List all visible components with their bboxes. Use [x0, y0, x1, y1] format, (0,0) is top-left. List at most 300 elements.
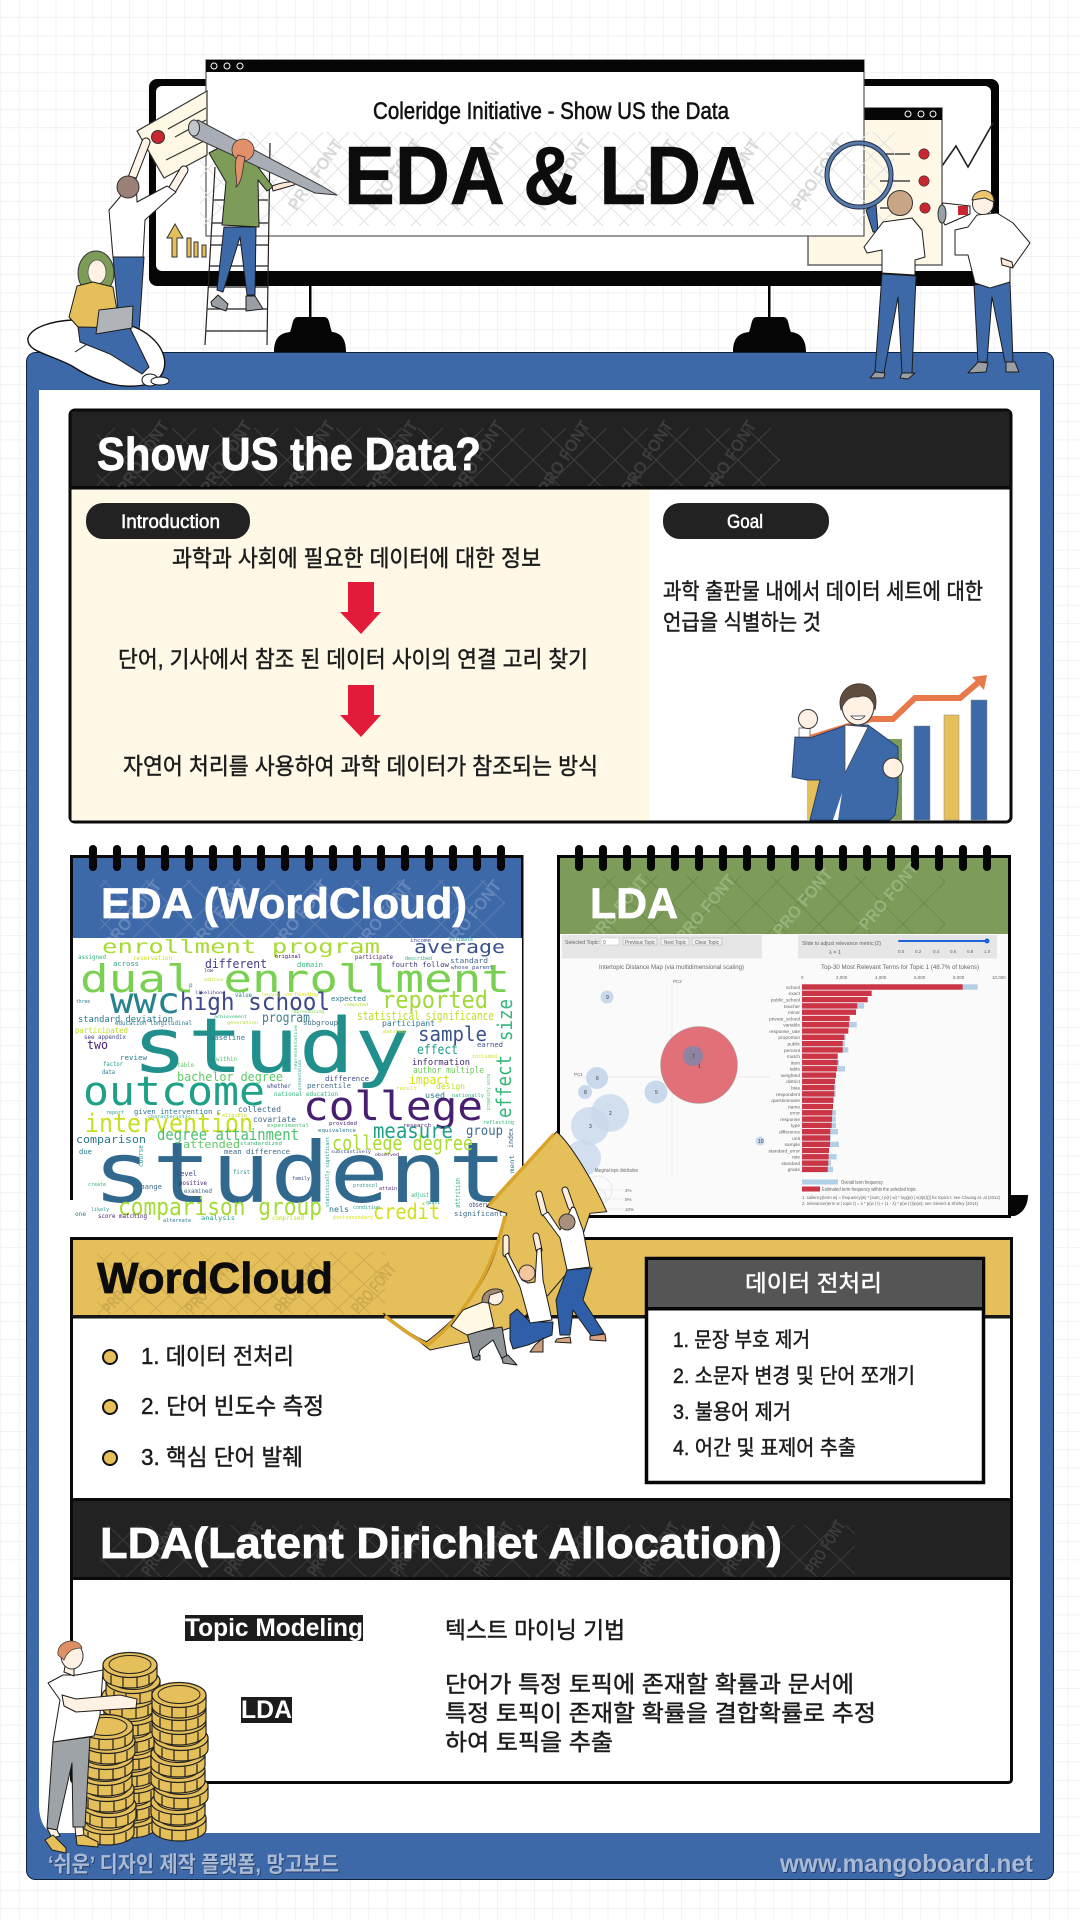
- wordcloud image: student: [93, 1124, 507, 1222]
- document: [137, 91, 207, 178]
- person middle: [505, 1236, 553, 1352]
- wordcloud image: impact: [409, 1073, 450, 1087]
- wordcloud image: degree attainment: [157, 1125, 299, 1144]
- wordcloud image: described: [405, 956, 432, 962]
- panel: LDA explanation: PRO FONT: [303, 1518, 352, 1580]
- illustration: ladder and pencil: [188, 120, 337, 345]
- wordcloud image: statistically significant: [325, 1137, 331, 1207]
- wordcloud image: average: [414, 937, 505, 958]
- intertopic map: 10: [758, 1139, 764, 1145]
- title window: [200, 60, 895, 236]
- bar chart: top-30 terms: difference: [779, 1130, 800, 1136]
- wordcloud image: result: [396, 1086, 417, 1092]
- wordcloud image: college degree: [332, 1131, 473, 1155]
- wordcloud image: participate: [355, 954, 393, 961]
- intertopic map: 3: [589, 1124, 592, 1130]
- wordcloud image: expected: [331, 995, 366, 1003]
- wordcloud image: baseline: [210, 1034, 245, 1042]
- panel: Show US the Data: PRO FONT: [535, 417, 594, 497]
- wordcloud image: low: [204, 968, 214, 974]
- panel: LDA calendar: [558, 849, 1040, 1218]
- wordcloud image: design: [436, 1082, 465, 1091]
- wordcloud image: research: [403, 1123, 431, 1129]
- wordcloud image: equivalence: [318, 1128, 356, 1134]
- coin stack right: [151, 1682, 208, 1841]
- bar chart: top-30 terms: 10,000: [992, 975, 1006, 980]
- intertopic map: 5%: [625, 1197, 632, 1202]
- coin stack front: [78, 1714, 136, 1845]
- pill: Goal: [663, 503, 829, 539]
- wordcloud image: included: [472, 1054, 497, 1060]
- calendar rings: [93, 849, 501, 867]
- label: Topic Modeling: Topic Modeling: [185, 1614, 363, 1642]
- blue frame panel: [26, 352, 1054, 1880]
- wordcloud image: high school: [180, 988, 330, 1016]
- wordcloud image: quasi: [426, 1200, 440, 1206]
- man: [47, 1737, 90, 1830]
- wordcloud image: index: [507, 1128, 515, 1148]
- wordcloud image: standardized: [240, 1141, 282, 1147]
- panel: Show US the Data: PRO FONT: [449, 417, 508, 497]
- bar chart: top-30 terms: minor: [788, 1010, 800, 1016]
- wordcloud image: positive: [179, 1180, 207, 1187]
- wordcloud image: credit: [373, 1200, 440, 1224]
- wordcloud image: mean difference: [224, 1148, 290, 1156]
- controls: 0.4: [933, 949, 940, 954]
- box list: [673, 1329, 915, 1460]
- wordcloud image: intervention: [85, 1109, 253, 1139]
- wordcloud image: propensity score: [486, 1074, 492, 1110]
- wordcloud image: first: [233, 1169, 250, 1176]
- panel: LDA explanation: PRO FONT: [137, 1518, 186, 1580]
- bar chart: top-30 terms: item: [791, 1060, 800, 1066]
- wordcloud image: percentile: [307, 1082, 351, 1090]
- wordcloud image: examined: [184, 1188, 212, 1195]
- chart legend and notes: [802, 1180, 1000, 1206]
- wordcloud image: enrollment program: [102, 936, 380, 958]
- heading: WordCloud: [97, 1254, 333, 1303]
- wordcloud image: original: [275, 954, 301, 960]
- intertopic map: PC1: [574, 1072, 583, 1077]
- intertopic map: 2%: [625, 1188, 632, 1193]
- wordcloud image: collected: [238, 1105, 281, 1114]
- wordcloud image: attended: [183, 1138, 240, 1151]
- text: LDA definition: [445, 1671, 876, 1755]
- wordcloud image: national education: [274, 1091, 338, 1098]
- bar chart: top-30 terms: questionnaire: [771, 1098, 800, 1104]
- panel: EDA WordCloud calendar: PRO FONT: [186, 876, 252, 953]
- wordcloud image: reported: [382, 986, 488, 1014]
- wordcloud image: measure: [373, 1119, 453, 1143]
- controls: λ = 1: [829, 950, 841, 956]
- panel: Show US the Data: PRO FONT: [701, 417, 760, 497]
- bullet list: [103, 1343, 324, 1470]
- wordcloud image: comparison group: [118, 1193, 322, 1221]
- panel: LDA explanation: PRO FONT: [552, 1518, 601, 1580]
- header monitor: [149, 79, 999, 352]
- person right: [539, 1190, 606, 1343]
- wordcloud image: covariate: [253, 1115, 296, 1124]
- intertopic map: 2: [609, 1111, 612, 1117]
- wordcloud image: attrition: [454, 1178, 462, 1208]
- panel: WordCloud: [72, 1238, 1012, 1500]
- intro step 2: 단어, 기사에서 참조 된 데이터 사이의 연결 고리 찾기: [118, 646, 588, 672]
- wordcloud image: characteristic: [148, 1114, 192, 1119]
- bar chart: top-30 terms: standard: [781, 1161, 800, 1167]
- wordcloud image: value: [235, 992, 252, 999]
- wordcloud image: size: [493, 999, 517, 1041]
- bar chart: top-30 terms: exact: [789, 991, 801, 997]
- wordcloud image: create: [88, 1182, 106, 1188]
- wordcloud image: presentation: [297, 1059, 302, 1090]
- chart legend and notes: Overall term frequency: [841, 1180, 883, 1186]
- wordcloud image: standard: [450, 957, 488, 965]
- wordcloud image: one: [75, 1211, 86, 1218]
- wordcloud image: comprised: [272, 1215, 304, 1222]
- panel: EDA WordCloud calendar: PRO FONT: [440, 876, 506, 953]
- footer right url: www.mangoboard.net: [779, 1850, 1034, 1878]
- goal text: 언급을 식별하는 것: [663, 610, 821, 635]
- illustration: businessman with growth chart: [792, 675, 987, 820]
- bar chart: top-30 terms: standard_error: [769, 1148, 800, 1154]
- controls: 0.6: [950, 949, 957, 954]
- text: Topic Modeling definition: 텍스트 마이닝 기법: [445, 1617, 625, 1643]
- illustration: man with coin stacks: [45, 1641, 208, 1853]
- panel: Show US the Data: PRO FONT: [280, 417, 339, 497]
- footer left text: ‘쉬운’ 디자인 제작 플랫폼, 망고보드: [48, 1852, 339, 1877]
- bullet list: 3. 핵심 단어 발췌: [141, 1444, 303, 1470]
- coin stack back: [102, 1652, 160, 1838]
- title window: PRO FONT: [363, 135, 426, 214]
- wordcloud image: ment: [509, 1155, 516, 1173]
- wordcloud image: group: [466, 1124, 503, 1139]
- bar chart: top-30 terms: weighted: [781, 1073, 800, 1079]
- wordcloud image: reservation: [133, 955, 172, 962]
- wordcloud image: across: [113, 960, 139, 968]
- intro step 1: 과학과 사회에 필요한 데이터에 대한 정보: [172, 545, 541, 571]
- wordcloud image: difference: [325, 1075, 369, 1083]
- bar chart: top-30 terms: bias: [791, 1086, 801, 1092]
- panel: LDA calendar: PRO FONT: [769, 865, 837, 940]
- person left: [451, 1289, 517, 1365]
- wordcloud image: participated: [75, 1026, 128, 1035]
- bar chart: top-30 terms: unit: [792, 1136, 801, 1142]
- label: LDA: LDA: [241, 1696, 292, 1724]
- panel: LDA calendar: PRO FONT: [672, 871, 740, 946]
- box list: 1. 문장 부호 제거: [673, 1329, 810, 1352]
- controls: Previous Topic: [625, 940, 655, 946]
- wordcloud image: three: [76, 999, 90, 1005]
- intertopic map: 8: [584, 1090, 587, 1096]
- controls: [562, 935, 997, 958]
- intertopic map: 6: [596, 1076, 599, 1082]
- heading: LDA(Latent Dirichlet Allocation): [100, 1519, 782, 1568]
- bar chart: top-30 terms: school: [786, 985, 800, 991]
- wordcloud image: likely: [91, 1207, 109, 1213]
- goal text: 과학 출판물 내에서 데이터 세트에 대한: [663, 579, 983, 604]
- controls: 1.0: [984, 949, 991, 954]
- wordcloud image: learning: [262, 992, 280, 997]
- panel: Show US the Data: PRO FONT: [618, 417, 677, 497]
- wordcloud image: observ: [469, 1201, 489, 1209]
- wordcloud image: different: [205, 957, 267, 971]
- bar chart: top-30 terms: table: [790, 1066, 800, 1072]
- wordcloud image: participant: [382, 1019, 435, 1028]
- wordcloud image: see appendix: [84, 1034, 126, 1041]
- controls: 0.0: [898, 949, 905, 954]
- wordcloud image: attain: [379, 1186, 397, 1192]
- box title: 데이터 전처리: [745, 1270, 882, 1296]
- panel: LDA explanation: PRO FONT: [220, 1518, 269, 1580]
- wordcloud image: dual enrollment: [80, 957, 510, 1001]
- bar chart: top-30 terms: 6,000: [914, 975, 926, 980]
- panel: LDA calendar: PRO FONT: [585, 871, 653, 946]
- pill: Goal: Goal: [727, 512, 763, 533]
- controls: Clear Topic: [695, 940, 719, 946]
- chart legend and notes: Estimated term frequency within the selected topic: [822, 1187, 916, 1193]
- panel: Show US the Data: [70, 410, 1011, 822]
- wordcloud image: change: [136, 1183, 162, 1191]
- wordcloud image: adjust: [411, 1192, 429, 1199]
- wordcloud image: factor: [103, 1061, 123, 1068]
- panel: LDA explanation: PRO FONT: [386, 1518, 435, 1580]
- title window: PRO FONT: [701, 135, 764, 214]
- wordcloud image: whose parent: [451, 965, 493, 971]
- LDA visualisation: [562, 935, 1006, 1212]
- wordcloud image: review: [120, 1054, 148, 1062]
- bar chart: top-30 terms: 4,000: [875, 975, 887, 980]
- goal text: [663, 579, 983, 635]
- panel: EDA WordCloud calendar: PRO FONT: [268, 876, 334, 953]
- standing man: [113, 257, 144, 332]
- wordcloud image: representing: [291, 1009, 325, 1014]
- bar chart: top-30 terms: district: [786, 1079, 801, 1085]
- intertopic map: 5: [655, 1090, 658, 1096]
- box: data preprocessing: [646, 1258, 984, 1482]
- panel: WordCloud: PRO FONT: [98, 1259, 152, 1318]
- bar chart: top-30 terms: response: [780, 1117, 800, 1123]
- bar chart: top-30 terms: response_rate: [769, 1029, 800, 1035]
- panel: LDA explanation: PRO FONT: [801, 1516, 850, 1578]
- wordcloud image: p: [189, 982, 193, 989]
- bar chart: top-30 terms: public: [787, 1042, 801, 1048]
- bar chart: top-30 terms: teacher: [784, 1004, 800, 1010]
- panel: LDA explanation: PRO FONT: [718, 1518, 767, 1580]
- panel: WordCloud: PRO FONT: [270, 1259, 324, 1318]
- controls: 0.8: [967, 949, 974, 954]
- wordcloud image: income: [410, 938, 431, 944]
- panel: LDA calendar: PRO FONT: [855, 859, 923, 934]
- wordcloud image: fourth follow: [391, 961, 450, 969]
- intertopic map: 7: [692, 1054, 695, 1060]
- wordcloud image: table: [177, 1062, 194, 1069]
- bar chart: top-30 terms: percent: [784, 1048, 801, 1054]
- panel: EDA WordCloud calendar: PRO FONT: [100, 876, 166, 953]
- icon: zigzag line chart: [942, 123, 993, 167]
- wordcloud image: study: [132, 1001, 410, 1090]
- wordcloud image: eligible: [222, 1113, 247, 1119]
- title window: PRO FONT: [618, 135, 681, 214]
- heading: EDA (WordCloud): [101, 880, 467, 928]
- bar chart: top-30 terms: error: [790, 1110, 800, 1116]
- pill: Introduction: [86, 503, 250, 539]
- intro step 3: 자연어 처리를 사용하여 과학 데이터가 참조되는 방식: [123, 753, 598, 779]
- wordcloud image: given intervention c: [134, 1108, 221, 1116]
- bar chart: top-30 terms: grade: [788, 1167, 800, 1173]
- wordcloud image: information: [412, 1058, 470, 1068]
- wordcloud image: level: [176, 1170, 197, 1178]
- controls: Selected Topic:: [565, 940, 600, 946]
- panel: WordCloud: PRO FONT: [347, 1259, 401, 1318]
- sitting woman on mouse: [28, 320, 165, 386]
- heading: LDA: [590, 880, 678, 928]
- pill: Introduction: Introduction: [121, 512, 220, 533]
- heading: Show US the Data?: [97, 428, 481, 480]
- controls: 0: [603, 940, 606, 946]
- title window: PRO FONT: [787, 135, 850, 214]
- wordcloud image: [73, 936, 522, 1224]
- wordcloud image: used: [425, 1091, 445, 1100]
- box list: 3. 불용어 제거: [673, 1401, 791, 1424]
- text: LDA definition: 하여 토픽을 추출: [445, 1729, 613, 1755]
- wordcloud image: condition: [353, 1205, 380, 1211]
- wordcloud image: bachelor degree: [177, 1070, 283, 1084]
- bar chart: top-30 terms: name: [788, 1106, 800, 1110]
- panel: LDA explanation: [72, 1500, 1012, 1782]
- wordcloud image: outcome: [83, 1069, 265, 1115]
- controls: Slide to adjust relevance metric:(2): [802, 941, 881, 947]
- bar chart: top-30 terms: 2,000: [836, 975, 848, 980]
- box list: 2. 소문자 변경 및 단어 쪼개기: [673, 1365, 915, 1388]
- wordcloud image: computed: [344, 1002, 369, 1007]
- arrow down 1: [340, 582, 381, 634]
- panel: EDA WordCloud calendar: PRO FONT: [351, 876, 417, 953]
- intertopic map: Marginal topic distribution: [595, 1168, 638, 1174]
- wordcloud image: family: [292, 1176, 310, 1182]
- wordcloud image: analysis: [201, 1215, 235, 1222]
- intertopic map: 1: [698, 1064, 701, 1070]
- wordcloud image: whether: [267, 1083, 291, 1090]
- LDA visualisation: Top-30 Most Relevant Terms for Topic 1 (48.7% of tokens): [821, 964, 979, 971]
- bar chart: top-30 terms: match: [787, 1054, 800, 1060]
- panel: LDA explanation: PRO FONT: [635, 1518, 684, 1580]
- wordcloud image: wwc: [110, 981, 180, 1022]
- title window: PRO FONT: [284, 135, 347, 214]
- wordcloud image: education longitudinal: [115, 1020, 192, 1027]
- intertopic map: 10%: [625, 1207, 634, 1212]
- wordcloud image: two: [87, 1038, 108, 1052]
- wordcloud image: likelihood: [195, 990, 226, 995]
- illustration: people holding document: [28, 91, 207, 386]
- bar chart: top-30 terms: proportion: [778, 1035, 800, 1041]
- title window: PRO FONT: [532, 135, 595, 214]
- wordcloud image: sample: [418, 1022, 487, 1046]
- wordcloud image: protocol: [353, 1183, 378, 1189]
- bar chart: top-30 terms: rate: [792, 1154, 800, 1160]
- panel: Show US the Data: PRO FONT: [114, 417, 173, 497]
- wordcloud image: significant: [454, 1210, 503, 1218]
- chart legend and notes: 2. relevance(term w | topic t) = λ * p(w | t) + (1 - λ) * p(w | t)/p(w); see Sievert & Shirley (2014): [802, 1201, 978, 1206]
- wordcloud image: course: [137, 1145, 145, 1167]
- panel: LDA explanation: PRO FONT: [469, 1518, 518, 1580]
- text: LDA definition: 단어가 특정 토픽에 존재할 확률과 문서에: [445, 1671, 854, 1697]
- bar chart: top-30 terms: 8,000: [953, 975, 965, 980]
- wordcloud image: assigned: [78, 954, 106, 961]
- bar chart: top-30 terms: 0: [801, 975, 804, 980]
- wordcloud image: representative: [293, 1024, 298, 1070]
- panel: WordCloud: PRO FONT: [181, 1259, 235, 1318]
- wordcloud image: domain: [297, 961, 323, 969]
- wordcloud image: substantively: [331, 1149, 372, 1154]
- bullet list: 2. 단어 빈도수 측정: [141, 1393, 324, 1419]
- main title: EDA & LDA: [344, 129, 756, 222]
- bar chart: top-30 terms: [769, 975, 1006, 1173]
- LDA visualisation: Intertopic Distance Map (via multidimensional scaling): [599, 964, 744, 971]
- controls: 0.2: [915, 949, 922, 954]
- wordcloud image: report: [106, 1110, 124, 1116]
- wordcloud image: achievement: [214, 1014, 248, 1019]
- intertopic map: PC2: [673, 979, 682, 984]
- wordcloud image: college: [303, 1084, 483, 1130]
- wordcloud image: matched: [383, 1029, 406, 1034]
- wordcloud image: standard deviation: [78, 1015, 173, 1025]
- wordcloud image: comparison: [76, 1133, 146, 1146]
- wordcloud image: earned: [477, 1041, 503, 1049]
- wordcloud image: author multiple: [413, 1066, 484, 1076]
- box list: 4. 어간 및 표제어 추출: [673, 1437, 856, 1460]
- wordcloud image: observed: [375, 1152, 400, 1157]
- illustration: people lifting big arrow: [383, 1132, 607, 1365]
- panel: Show US the Data: PRO FONT: [363, 417, 422, 497]
- wordcloud image: program: [262, 1011, 310, 1026]
- wordcloud image: within: [216, 1056, 237, 1063]
- monitor stand left: [274, 286, 346, 352]
- wordcloud image: effect: [492, 1055, 516, 1118]
- wordcloud image: nationally: [452, 1093, 484, 1099]
- wordcloud image: statistical significance: [357, 1009, 494, 1023]
- bar chart: top-30 terms: type: [791, 1123, 800, 1129]
- panel: Show US the Data: PRO FONT: [197, 417, 256, 497]
- wordcloud image: subgroup: [303, 1019, 338, 1027]
- wordcloud image: data: [102, 1069, 115, 1076]
- bar chart: top-30 terms: public_school: [771, 998, 800, 1004]
- text: LDA definition: 특정 토픽이 존재할 확률을 결합확률로 추정: [445, 1700, 876, 1726]
- wordcloud image: confounding: [285, 992, 318, 998]
- wordcloud image: postsecondary: [333, 1215, 373, 1221]
- intertopic map: [565, 979, 770, 1212]
- arrow down 2: [340, 685, 381, 737]
- wordcloud image: experimental: [267, 1123, 309, 1129]
- wordcloud image: score matching: [98, 1213, 147, 1220]
- controls: Next Topic: [664, 940, 686, 946]
- bar chart: top-30 terms: sample: [785, 1142, 800, 1148]
- wordcloud image: due: [79, 1148, 92, 1156]
- wordcloud image: alternate: [163, 1218, 191, 1224]
- chart legend and notes: 1. saliency(term w) = frequency(w) * [sum_t p(t | w) * log(p(t | w)/p(t))] for topics t; see Chuang et. al (2012): [802, 1195, 1000, 1200]
- illustration: magnifier man and megaphone man: [827, 143, 1030, 379]
- wordcloud image: nels: [329, 1205, 349, 1214]
- wordcloud image: generation: [227, 1020, 259, 1025]
- cream window with bullet dots: [808, 108, 942, 265]
- title window: PRO FONT: [446, 135, 509, 214]
- wordcloud image: reflecting: [483, 1120, 514, 1126]
- icon: small growth arrow and bars: [167, 224, 206, 257]
- subtitle: Coleridge Initiative - Show US the Data: [373, 98, 730, 125]
- wordcloud image: provided: [329, 1121, 357, 1127]
- monitor stand right: [733, 286, 806, 352]
- bullet list: 1. 데이터 전처리: [141, 1343, 294, 1369]
- intertopic map: 9: [606, 995, 609, 1001]
